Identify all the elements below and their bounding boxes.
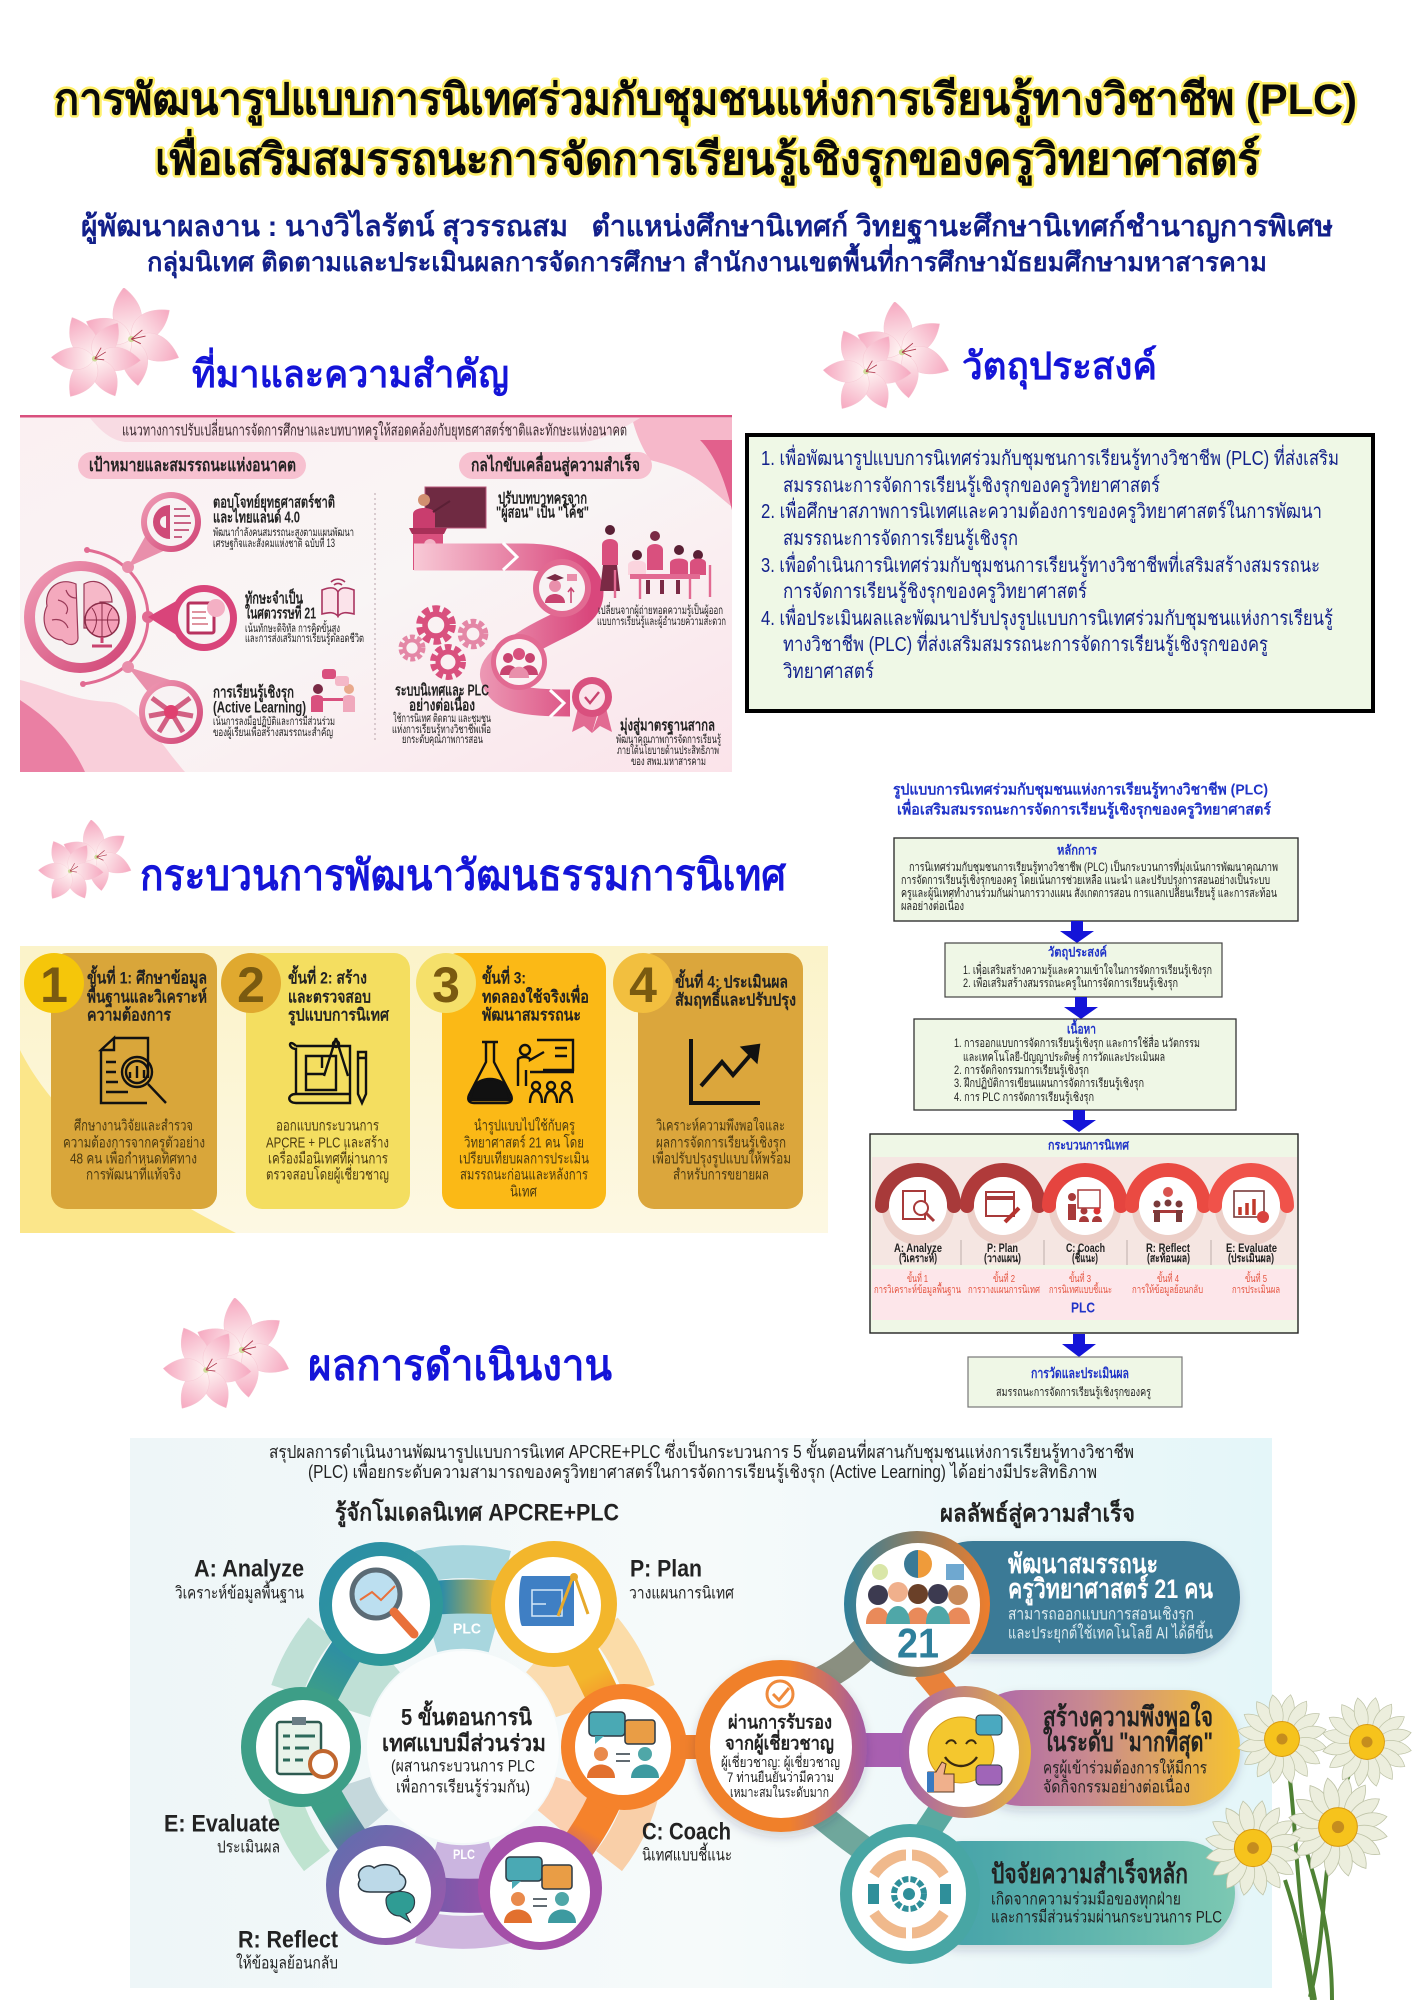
card 1: ความต้องการ: [87, 1006, 172, 1024]
box: principles: ครูและผู้นิเทศทำงานร่วมกันผ่านการวางแผน สังเกตการสอน การแลกเปลี่ยนเรียนรู้ และการสะท้อน: [901, 884, 1277, 901]
icon: two people talking: [311, 669, 355, 712]
card 1: ความต้องการจากครูตัวอย่าง: [63, 1134, 205, 1152]
panel: objectives: วิทยาศาสตร์: [783, 660, 874, 683]
heading: process: กระบวนการพัฒนาวัฒนธรรมการนิเทศ: [140, 852, 787, 898]
node: expert approval: จากผู้เชี่ยวชาญ: [725, 1730, 834, 1756]
arrow: [1064, 997, 1098, 1019]
label C: นิเทศแบบชี้แนะ: [642, 1842, 732, 1864]
card 1: ขั้นที่ 1: ศึกษาข้อมูล: [87, 964, 207, 990]
step names: (วางแผน): [984, 1253, 1021, 1265]
box: supervision process: กระบวนการนิเทศ: [1048, 1138, 1130, 1152]
card 2: รูปแบบการนิเทศ: [288, 1006, 390, 1026]
label A: [175, 1556, 304, 1604]
box: principles: การนิเทศร่วมกับชุมชนการเรียนรู้ทางวิชาชีพ (PLC) เป็นกระบวนการที่มุ่งเน้นการพัฒนาคุณภาพ: [909, 858, 1278, 875]
node: hands: [128, 667, 203, 744]
text: standards: ของ สพม.มหาสารคาม: [631, 756, 706, 768]
outcome pill 2: ครูผู้เข้าร่วมต้องการให้มีการ: [1043, 1758, 1207, 1778]
heading: outcomes: ผลลัพธ์สู่ความสำเร็จ: [940, 1498, 1135, 1528]
panel: background infographic: [20, 415, 732, 772]
step names: (วิเคราะห์): [899, 1251, 937, 1265]
panel: objectives: สมรรถนะการจัดการเรียนรู้เชิงรุก: [783, 528, 1018, 551]
node: expert approval: เหมาะสมในระดับมาก: [730, 1784, 829, 1800]
panel: results infographic: [130, 1438, 1272, 1988]
subtitle: author: ผู้พัฒนาผลงาน : นางวิไลรัตน์ สุวรรณสม ตำแหน่งศึกษานิเทศก์ วิทยฐานะศึกษานิเทศก์ชำนาญการพิเศษ: [81, 209, 1333, 245]
node: expert approval: ผู้เชี่ยวชาญ: ผู้เชี่ยวชาญ: [721, 1753, 840, 1771]
pill: goals: [78, 452, 306, 479]
node: expert approval: 7 ท่านยืนยันว่ามีความ: [727, 1769, 834, 1785]
label C: [642, 1818, 732, 1864]
card 3: วิทยาศาสตร์ 21 คน โดย: [464, 1134, 584, 1152]
step details: การวางแผนการนิเทศ: [968, 1284, 1040, 1296]
label P: [629, 1556, 734, 1602]
text: active learning: ของผู้เรียนเพื่อสร้างสมรรถนะสำคัญ: [213, 724, 333, 739]
step details: ขั้นที่ 2: [993, 1271, 1015, 1285]
panel: objectives: [747, 435, 1373, 711]
outcome pill 3: และการมีส่วนร่วมผ่านกระบวนการ PLC: [991, 1908, 1222, 1926]
outcome pill 3: ปัจจัยความสำเร็จหลัก: [991, 1856, 1188, 1889]
box: evaluation: สมรรถนะการจัดการเรียนรู้เชิงรุกของครู: [996, 1385, 1151, 1400]
PLC petal labels: PLC: [453, 1620, 481, 1638]
step details: การนิเทศแบบชี้แนะ: [1049, 1282, 1112, 1296]
step details: ขั้นที่ 3: [1069, 1271, 1091, 1285]
PLC petal labels: [453, 1620, 481, 1862]
card 1: [24, 953, 217, 1209]
card 3: นิเทศ: [510, 1184, 537, 1200]
text: standards: มุ่งสู่มาตรฐานสากล: [620, 718, 715, 736]
text: 21st century skills: [245, 586, 364, 645]
icon: blueprint compass: [289, 1038, 366, 1103]
illustration: teachers at table: [600, 525, 710, 599]
box: content: 3. ฝึกปฏิบัติการเขียนแผนการจัดการเรียนรู้เชิงรุก: [954, 1076, 1144, 1091]
outcome pill 3: [840, 1824, 1235, 1964]
step names: (ประเมินผล): [1228, 1252, 1274, 1265]
text: strategy: เศรษฐกิจและสังคมแห่งชาติ ฉบับที่ 13: [213, 535, 335, 550]
node: graduate: [533, 559, 591, 617]
step details: [874, 1271, 1280, 1296]
outcome pill 2: สร้างความพึงพอใจ: [1043, 1701, 1213, 1732]
icon: rising chart: [691, 1039, 760, 1103]
node: tablet: [148, 585, 237, 651]
card 4: ขั้นที่ 4: ประเมินผล: [675, 968, 788, 992]
card 4: สำหรับการขยายผล: [673, 1166, 769, 1184]
step names: E: Evaluate: [1226, 1241, 1277, 1255]
box: content: 2. การจัดกิจกรรมการเรียนรู้เชิงรุก: [954, 1063, 1089, 1078]
outcome pill 1: ครูวิทยาศาสตร์ 21 คน: [1008, 1573, 1213, 1606]
icon: hands and gear: [868, 1855, 951, 1933]
text: role: "ผู้สอน" เป็น "โค้ช": [496, 500, 589, 524]
centre text: เทศแบบมีส่วนร่วม: [382, 1730, 546, 1756]
card 4: วิเคราะห์ความพึงพอใจและ: [656, 1116, 785, 1134]
box: objectives: วัตถุประสงค์: [1048, 944, 1107, 960]
text: PLC system: ใช้การนิเทศ ติดตาม และชุมชน: [393, 712, 491, 725]
card 1: พื้นฐานและวิเคราะห์: [87, 984, 207, 1008]
heading: model: รู้จักโมเดลนิเทศ APCRE+PLC: [335, 1498, 619, 1528]
pill: drivers: [459, 452, 652, 479]
text: strategy: พัฒนากำลังคนสมรรถนะสูงตามแผนพัฒนา: [213, 526, 354, 539]
icon: flask and classroom: [468, 1040, 574, 1103]
text: strategy: [213, 492, 354, 550]
flow title: รูปแบบการนิเทศร่วมกับชุมชนแห่งการเรียนรู้ทางวิชาชีพ (PLC): [893, 780, 1268, 800]
centre text: (ผสานกระบวนการ PLC: [391, 1756, 535, 1776]
text: standards: [616, 718, 721, 768]
box: principles: หลักการ: [1057, 842, 1097, 858]
icon: lily 3: [27, 818, 135, 911]
card 2: ออกแบบกระบวนการ: [276, 1118, 379, 1134]
card 3: พัฒนาสมรรถนะ: [482, 1006, 581, 1024]
step names: A: Analyze: [894, 1241, 942, 1255]
step names: R: Reflect: [1146, 1241, 1190, 1255]
label E: E: Evaluate: [164, 1810, 280, 1838]
text: PLC system: ระบบนิเทศและ PLC: [395, 682, 489, 700]
step names: (สะท้อนผล): [1147, 1252, 1190, 1265]
icon: medal: [572, 677, 612, 733]
card 4: ผลการจัดการเรียนรู้เชิงรุก: [656, 1134, 786, 1152]
box: objectives: [945, 943, 1222, 997]
box: principles: ผลอย่างต่อเนื่อง: [901, 897, 964, 913]
step names: P: Plan: [987, 1241, 1018, 1255]
step names: [894, 1241, 1277, 1265]
card 1: 48 คน เพื่อกำหนดทิศทาง: [70, 1148, 197, 1168]
box: evaluation: การวัดและประเมินผล: [1031, 1365, 1129, 1381]
card 2: ตรวจสอบโดยผู้เชี่ยวชาญ: [266, 1164, 389, 1184]
card 1: ศึกษางานวิจัยและสำรวจ: [74, 1118, 193, 1134]
card 3: [416, 953, 606, 1209]
step details: ขั้นที่ 4: [1157, 1271, 1179, 1285]
outcome pill 2: จัดกิจกรรมอย่างต่อเนื่อง: [1043, 1774, 1190, 1796]
label C: C: Coach: [642, 1818, 731, 1846]
centre text: [382, 1700, 546, 1798]
outcome pill 2: ในระดับ "มากที่สุด": [1043, 1722, 1213, 1759]
node: coach purple: [478, 1826, 602, 1950]
text: active learning: (Active Learning): [213, 700, 306, 716]
step details: การประเมินผล: [1232, 1284, 1280, 1296]
arrow: [1062, 1334, 1096, 1357]
icon: lily 2: [808, 300, 954, 426]
outcome connectors: [680, 1630, 950, 1860]
node E: [241, 1687, 361, 1807]
card 1: การพัฒนาที่แท้จริง: [86, 1164, 181, 1184]
icon: lily 1: [36, 286, 184, 414]
pill: goals: เป้าหมายและสมรรถนะแห่งอนาคต: [89, 455, 296, 475]
text: strategy: ตอบโจทย์ยุทธศาสตร์ชาติ: [213, 492, 335, 512]
node: expert approval: [695, 1660, 867, 1832]
summary text: [269, 1439, 1134, 1483]
card 4: [613, 953, 803, 1209]
box: content: [914, 1018, 1236, 1110]
text: change role: แบบการเรียนรู้และผู้อำนวยความสะดวก: [597, 615, 726, 628]
PLC petal labels: PLC: [453, 1846, 475, 1862]
text: role: [496, 490, 589, 524]
step names: (ชี้แนะ): [1072, 1249, 1098, 1265]
outcome pill 2: [899, 1686, 1240, 1818]
card 3: 3: [432, 957, 460, 1013]
label E: [164, 1810, 280, 1856]
text: standards: พัฒนาคุณภาพการจัดการเรียนรู้: [616, 733, 721, 746]
outcome pill 1: และประยุกต์ใช้เทคโนโลยี AI ได้ดีขึ้น: [1008, 1620, 1213, 1644]
text: change role: เปลี่ยนจากผู้ถ่ายทอดความรู้เป็นผู้ออก: [598, 602, 723, 617]
text: role: ปรับบทบาทครูจาก: [498, 490, 587, 510]
subtitle: author: กลุ่มนิเทศ ติดตามและประเมินผลการจัดการศึกษา สำนักงานเขตพื้นที่การศึกษามัธยมศึกษามหาสารคาม: [147, 242, 1267, 279]
card 4: สัมฤทธิ์และปรับปรุง: [675, 986, 796, 1010]
card 3: นำรูปแบบไปใช้กับครู: [474, 1116, 575, 1134]
icon: 21 teachers: [866, 1550, 970, 1624]
box: supervision process: PLC: [1071, 1300, 1095, 1316]
card 3: ขั้นที่ 3:: [482, 964, 526, 988]
box: content: 1. การออกแบบการจัดการเรียนรู้เชิงรุก และการใช้สื่อ นวัตกรรม: [954, 1034, 1200, 1051]
step details: การให้ข้อมูลย้อนกลับ: [1132, 1283, 1203, 1296]
step arcs: [882, 1170, 1287, 1206]
heading: background: ที่มาและความสำคัญ: [192, 347, 509, 396]
outcome pill 1: [844, 1531, 1240, 1677]
label R: R: Reflect: [238, 1926, 338, 1954]
box: principles: [894, 838, 1298, 921]
title: เพื่อเสริมสมรรถนะการจัดการเรียนรู้เชิงรุกของครูวิทยาศาสตร์: [155, 129, 1260, 187]
icon: lily 4: [148, 1296, 294, 1426]
title: [54, 76, 1357, 187]
node: people: [491, 634, 547, 690]
card 4: เพื่อปรับปรุงรูปแบบให้พร้อม: [652, 1148, 791, 1168]
label P: วางแผนการนิเทศ: [629, 1584, 734, 1602]
arrow: snake path: [414, 543, 590, 717]
label R: [236, 1926, 338, 1974]
node A: [319, 1542, 443, 1666]
title: การพัฒนารูปแบบการนิเทศร่วมกับชุมชนแห่งการเรียนรู้ทางวิชาชีพ (PLC): [54, 76, 1357, 127]
outcome pill 1: พัฒนาสมรรถนะ: [1008, 1549, 1158, 1579]
label A: วิเคราะห์ข้อมูลพื้นฐาน: [175, 1580, 304, 1604]
box: principles: การจัดการเรียนรู้เชิงรุกของครู โดยเน้นการช่วยเหลือ แนะนำ และปรับปรุงการสอนอย่างเป็นระบบ: [901, 872, 1270, 888]
panel: objectives: ทางวิชาชีพ (PLC) ที่ส่งเสริมสมรรถนะการจัดการเรียนรู้เชิงรุกของครู: [783, 630, 1268, 657]
hub: brain and globe: [24, 547, 154, 687]
card 3: ทดลองใช้จริงเพื่อ: [482, 984, 589, 1006]
summary text: สรุปผลการดำเนินงานพัฒนารูปแบบการนิเทศ APCRE+PLC ซึ่งเป็นกระบวนการ 5 ขั้นตอนที่ผสานกับชุมชนแห่งการเรียนรู้ทางวิชาชีพ: [269, 1439, 1134, 1463]
icon: document magnifier: [101, 1038, 166, 1103]
panel: objectives: สมรรถนะการจัดการเรียนรู้เชิงรุกของครูวิทยาศาสตร์: [783, 474, 1160, 498]
text: PLC system: แห่งการเรียนรู้ทางวิชาชีพเพื่อ: [392, 721, 491, 736]
card 2: เครื่องมือนิเทศที่ผ่านการ: [268, 1148, 388, 1168]
card 2: [221, 953, 410, 1209]
icon: teacher at board: [409, 487, 486, 570]
card 2: และตรวจสอบ: [288, 988, 371, 1006]
text: active learning: [213, 682, 335, 739]
box: content: เนื้อหา: [1067, 1018, 1096, 1036]
card 2: ขั้นที่ 2: สร้าง: [288, 964, 367, 988]
arrow: [1060, 921, 1094, 943]
panel: four steps: [20, 946, 828, 1233]
node: strategy gear: [128, 492, 201, 567]
text: 21st century skills: และการส่งเสริมการเรียนรู้ตลอดชีวิต: [245, 632, 364, 645]
node: expert approval: ผ่านการรับรอง: [728, 1712, 832, 1734]
box: content: 4. การ PLC การจัดการเรียนรู้เชิงรุก: [954, 1090, 1094, 1105]
icon: gears: [402, 610, 485, 676]
text: active learning: เน้นการลงมือปฏิบัติและการมีส่วนร่วม: [213, 715, 335, 728]
outcome pill 3: เกิดจากความร่วมมือของทุกฝ่าย: [991, 1890, 1181, 1910]
icon: book: [322, 579, 354, 616]
icon: smiley: [927, 1715, 1002, 1792]
box: supervision process: [870, 1134, 1298, 1333]
box: objectives: 2. เพื่อเสริมสร้างสมรรถนะครูในการจัดการเรียนรู้เชิงรุก: [963, 974, 1178, 991]
text: PLC system: อย่างต่อเนื่อง: [409, 694, 475, 714]
node R: [326, 1825, 446, 1945]
step details: ขั้นที่ 5: [1245, 1271, 1267, 1285]
outcome pill 1: 21: [897, 1620, 939, 1666]
ring links: [301, 1596, 624, 1896]
card 3: เปรียบเทียบผลการประเมิน: [459, 1150, 589, 1168]
node C: [561, 1684, 687, 1810]
inner petals: [351, 1629, 575, 1865]
card 2: APCRE + PLC และสร้าง: [266, 1134, 389, 1152]
subtitle: author: [81, 209, 1333, 279]
step icons: [889, 1177, 1280, 1235]
card 1: 1: [40, 957, 68, 1013]
outer petals: [284, 1562, 642, 1932]
label A: A: Analyze: [194, 1556, 304, 1582]
label E: ประเมินผล: [217, 1838, 280, 1856]
box: objectives: 1. เพื่อเสริมสร้างความรู้และความเข้าใจในการจัดการเรียนรู้เชิงรุก: [963, 961, 1212, 978]
panel: objectives: การจัดการเรียนรู้ชิงรุกของครูวิทยาศาสตร์: [783, 580, 1087, 604]
text: PLC system: ยกระดับคุณภาพการสอน: [402, 734, 483, 746]
heading: results: ผลการดำเนินงาน: [308, 1342, 612, 1388]
text: strategy: และไทยแลนด์ 4.0: [213, 508, 300, 526]
decoration: daisies: [1205, 1693, 1413, 2000]
box: content: และเทคโนโลยี-ปัญญาประดิษฐ์ การวัดและประเมินผล: [963, 1050, 1165, 1064]
flow diagram: [870, 780, 1298, 1407]
panel: objectives: 2. เพื่อศึกษาสภาพการนิเทศและความต้องการของครูวิทยาศาสตร์ในการพัฒนา: [761, 497, 1322, 524]
card 3: สมรรถนะก่อนและหลังการ: [460, 1166, 588, 1184]
centre text: เพื่อการเรียนรู้ร่วมกัน): [396, 1774, 530, 1798]
node P: [491, 1541, 617, 1667]
card 2: 2: [237, 957, 265, 1013]
heading: objectives: วัตถุประสงค์: [962, 345, 1157, 390]
arrow: [1062, 1110, 1096, 1132]
text: 21st century skills: ทักษะจำเป็น: [245, 586, 303, 608]
centre circle: [367, 1651, 559, 1843]
label R: ให้ข้อมูลย้อนกลับ: [236, 1952, 338, 1974]
text: active learning: การเรียนรู้เชิงรุก: [213, 682, 294, 704]
flow title: [893, 780, 1272, 820]
text: 21st century skills: ในศตวรรษที่ 21: [245, 602, 316, 622]
panel heading: แนวทางการปรับเปลี่ยนการจัดการศึกษาและบทบาทครูให้สอดคล้องกับยุทธศาสตร์ชาติและทักษะแห่งอนาคต: [122, 418, 627, 440]
text: 21st century skills: เน้นทักษะดิจิทัล การคิดขั้นสูง: [245, 620, 340, 635]
pill: drivers: กลไกขับเคลื่อนสู่ความสำเร็จ: [471, 452, 640, 477]
text: standards: ภายใต้นโยบายด้านประสิทธิภาพ: [617, 743, 719, 757]
outcome pill 1: สามารถออกแบบการสอนเชิงรุก: [1008, 1604, 1194, 1624]
summary text: (PLC) เพื่อยกระดับความสามารถของครูวิทยาศาสตร์ในการจัดการเรียนรู้เชิงรุก (Active Learning) ได้อย่างมีประสิทธิภาพ: [308, 1459, 1097, 1483]
step details: ขั้นที่ 1: [907, 1271, 928, 1285]
box: evaluation: [968, 1357, 1182, 1407]
centre text: 5 ขั้นตอนการนิ: [401, 1700, 532, 1730]
text: PLC system: [392, 682, 491, 746]
flow title: เพื่อเสริมสมรรถนะการจัดการเรียนรู้เชิงรุกของครูวิทยาศาสตร์: [897, 798, 1272, 820]
step names: C: Coach: [1066, 1241, 1105, 1255]
step details: การวิเคราะห์ข้อมูลพื้นฐาน: [874, 1282, 961, 1296]
card 4: 4: [629, 957, 657, 1013]
text: change role: [597, 602, 726, 628]
label P: P: Plan: [630, 1556, 702, 1582]
